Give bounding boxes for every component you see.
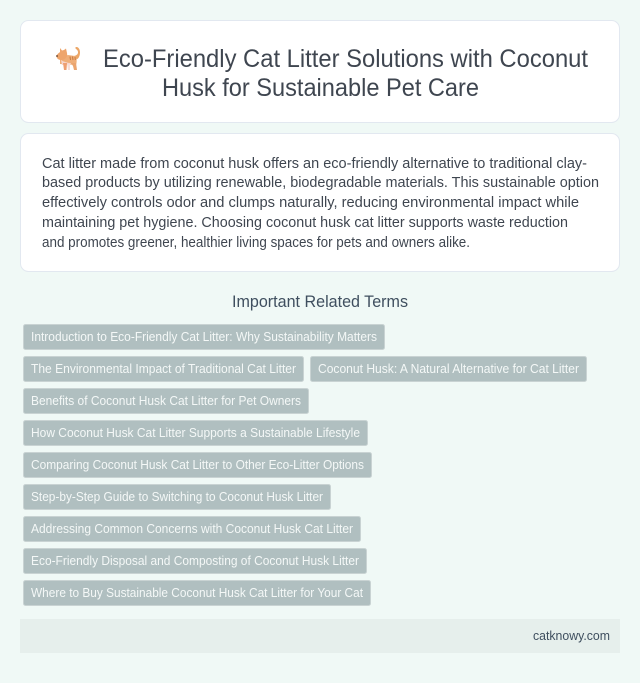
footer: source: catknowy.com xyxy=(533,629,610,643)
tag 6: Comparing Coconut Husk Cat Litter to Other Eco-Litter Options xyxy=(31,458,364,472)
tag 6 xyxy=(24,452,372,478)
tag 4 xyxy=(24,388,308,414)
text block: description: effectively controls odor and clumps naturally, reducing environmental impact while xyxy=(42,194,579,211)
tag 8: Addressing Common Concerns with Coconut Husk Cat Litter xyxy=(31,522,353,536)
tag list xyxy=(24,324,586,606)
panel: title card xyxy=(20,20,620,122)
title: Eco-Friendly Cat Litter Solutions with Coconut xyxy=(103,45,588,73)
tag 3: Coconut Husk: A Natural Alternative for Cat Litter xyxy=(318,362,579,376)
panel: description xyxy=(20,134,620,272)
text block: description: Cat litter made from coconut husk offers an eco-friendly alternative to traditional clay- xyxy=(42,155,587,172)
tag 2 xyxy=(24,356,304,382)
heading: important related terms: Important Related Terms xyxy=(232,293,408,311)
tag 4: Benefits of Coconut Husk Cat Litter for Pet Owners xyxy=(31,394,301,408)
tag 5: How Coconut Husk Cat Litter Supports a Sustainable Lifestyle xyxy=(31,426,360,440)
text block: description xyxy=(42,155,599,251)
footer xyxy=(20,619,620,653)
tag 5 xyxy=(24,420,368,446)
tag 9 xyxy=(24,548,366,574)
tag 8 xyxy=(24,516,360,542)
text block: description: based products by utilizing renewable, biodegradable materials. This sustainable option xyxy=(42,174,599,191)
title xyxy=(103,45,588,102)
tag 10: Where to Buy Sustainable Coconut Husk Cat Litter for Your Cat xyxy=(31,586,363,600)
text block: description: and promotes greener, healthier living spaces for pets and owners alike. xyxy=(42,234,470,251)
tag 10 xyxy=(24,580,370,606)
tag 2: The Environmental Impact of Traditional Cat Litter xyxy=(31,362,296,376)
icon: cat xyxy=(56,47,80,70)
tag 3 xyxy=(310,356,586,382)
tag 7: Step-by-Step Guide to Switching to Coconut Husk Litter xyxy=(31,490,323,504)
tag 9: Eco-Friendly Disposal and Composting of Coconut Husk Litter xyxy=(31,554,359,568)
title: Husk for Sustainable Pet Care xyxy=(162,74,479,102)
text block: description: maintaining pet hygiene. Choosing coconut husk cat litter supports waste reduction xyxy=(42,214,568,231)
tag 7 xyxy=(24,484,330,510)
tag 1: Introduction to Eco-Friendly Cat Litter: Why Sustainability Matters xyxy=(31,330,377,344)
tag 1 xyxy=(24,324,384,350)
